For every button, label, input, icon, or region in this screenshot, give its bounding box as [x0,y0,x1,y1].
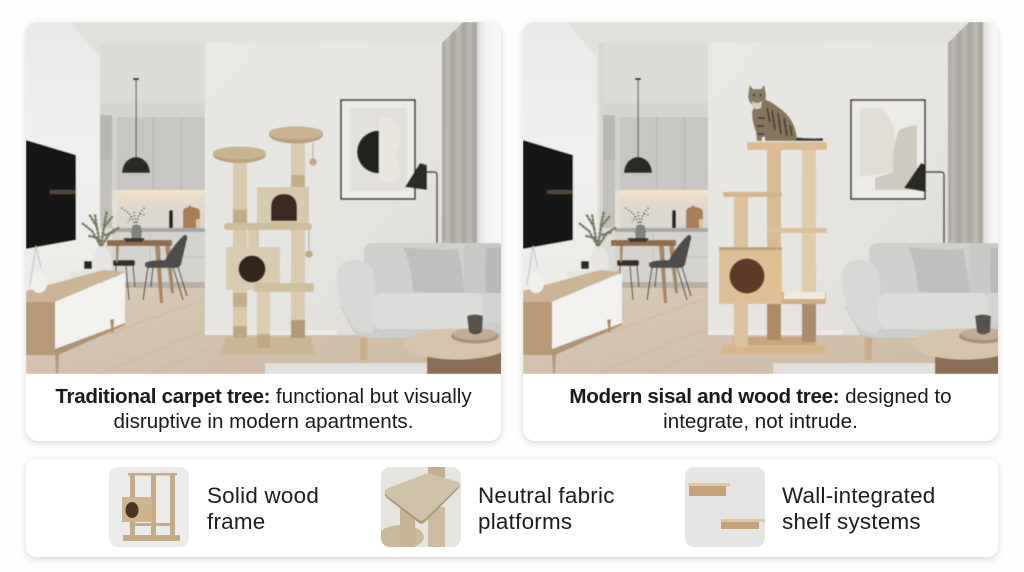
modern wood cat tree [719,85,827,354]
photo: living room with modern wood tree and cat [523,22,998,374]
panel: modern sisal and wood tree [523,22,998,441]
label: neutral fabric platforms: Neutral fabric [478,483,615,508]
caption: modern sisal and wood tree: integrate, not intrude. [663,410,858,433]
panel: traditional carpet tree [26,22,501,441]
artwork: black half circle [341,100,415,199]
label: solid wood frame [207,483,319,534]
artwork: abstract beige shapes [851,100,925,199]
icon: neutral fabric platform thumbnail [381,467,461,547]
label: solid wood frame: Solid wood [207,483,319,508]
panel: features strip [26,459,998,557]
label: wall-integrated shelf systems: shelf systems [782,509,921,534]
caption: modern sisal and wood tree: Modern sisal and wood tree: designed to [569,385,952,408]
carpet cat tree [213,126,323,355]
icon: solid wood frame thumbnail [109,467,189,547]
label: neutral fabric platforms: platforms [478,509,572,534]
caption: traditional carpet tree: disruptive in modern apartments. [114,410,413,433]
label: neutral fabric platforms [478,483,615,534]
label: solid wood frame: frame [207,509,265,534]
photo: living room with carpet cat tree [26,22,501,374]
caption: modern sisal and wood tree [569,385,952,433]
cat [748,85,823,141]
label: wall-integrated shelf systems [782,483,936,534]
floor lamp [405,163,437,243]
caption: traditional carpet tree [55,385,472,433]
floor lamp [904,163,944,243]
caption: traditional carpet tree: Traditional carpet tree: functional but visually [55,385,472,408]
label: wall-integrated shelf systems: Wall-integrated [782,483,936,508]
icon: wall-integrated shelves thumbnail [685,467,765,547]
